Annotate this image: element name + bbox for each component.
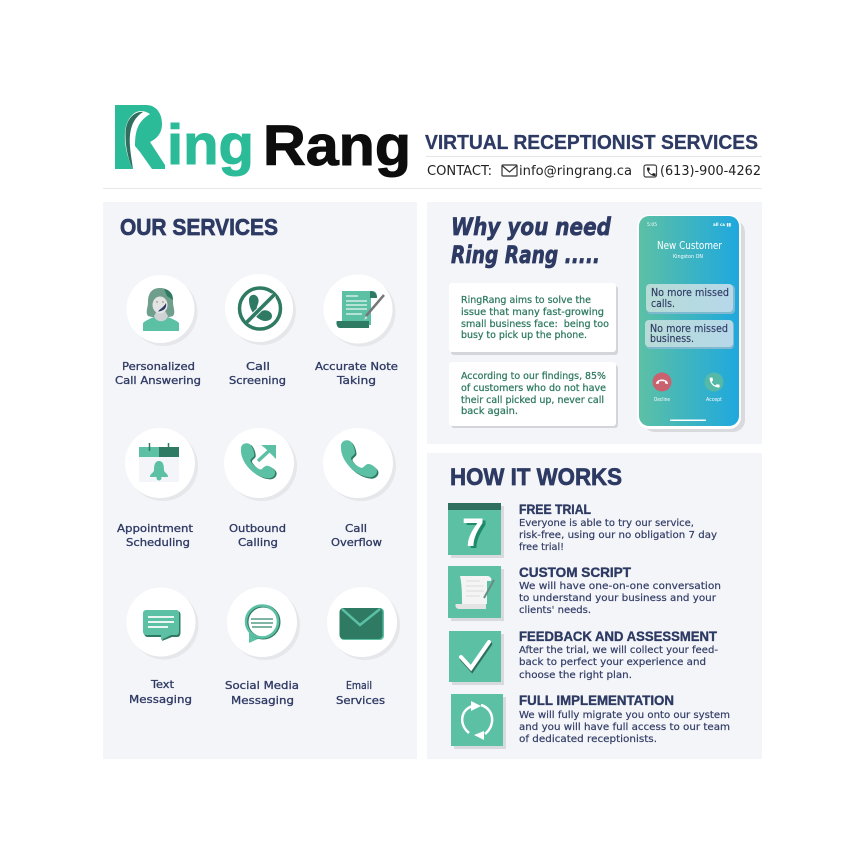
bubble: no more missed business: business. [650,333,694,345]
label [225,680,299,707]
service: outbound calling [224,428,297,549]
icon: script [448,566,504,621]
logo: RingRang [115,105,411,178]
label: Appointment [117,523,193,535]
phone mockup: 5:05 [647,222,657,228]
icon: refresh arrows [451,694,506,749]
title: virtual receptionist services: VIRTUAL RECEPTIONIST SERVICES [425,132,758,154]
label: Call [246,361,270,373]
contact row: (613)-900-4262 [660,164,761,179]
heading: why you need: Ring Rang ..... [451,241,600,269]
phone mockup: New Customer [657,240,723,252]
text: back to perfect your experience and [519,657,706,668]
label: Overflow [331,537,382,549]
card: findings: their call picked up, never call [461,395,604,406]
step: custom script [448,565,721,621]
card: aims: RingRang aims to solve the [461,295,591,306]
label: Accurate Note [315,361,398,373]
button: accept: Accept [706,397,722,403]
heading: our services: OUR SERVICES [120,214,278,240]
text: choose the right plan. [519,670,632,681]
bubble: no more missed calls: calls. [651,298,675,310]
text: FEEDBACK AND ASSESSMENT [519,629,718,644]
service: call screening [225,274,296,387]
card: findings: According to our findings, 85% [461,371,606,382]
text: Everyone is able to try our service, [519,518,694,529]
text: After the trial, we will collect your feed- [519,645,718,656]
panel: our services [103,202,417,759]
phone mockup: Kingston ON [673,254,703,260]
phone mockup [637,215,745,432]
text: CUSTOM SCRIPT [519,565,632,580]
text: and you will have full access to our team [519,722,730,733]
bubble: no more missed business: No more missed [650,323,728,335]
panel: why you need ring rang [427,202,762,444]
icon: envelope [502,165,517,176]
contact row: CONTACT: [427,164,492,179]
card: findings: back again. [461,406,518,417]
icon: check mark [449,631,504,685]
heading: why you need: Why you need [451,213,612,241]
text: to understand your business and your [519,593,717,604]
text [519,502,717,553]
logo: RingRang: ing [167,113,254,177]
label [129,679,192,706]
icon: calendar seven: 7 [465,513,487,557]
label: Messaging [129,694,192,706]
label: Text [150,679,174,691]
icon: calendar seven [448,503,504,558]
service: social media messaging [225,587,300,707]
label [229,361,286,387]
label [315,361,398,387]
label: Messaging [231,695,294,707]
label [331,523,382,549]
label [117,523,193,549]
text: We will fully migrate you onto our system [519,710,730,721]
text: FULL IMPLEMENTATION [519,693,674,708]
label: Services [336,695,385,707]
panel: how it works [427,453,762,759]
button: accept [704,372,724,403]
card: aims: issue that many fast-growing [461,307,604,318]
step: free trial [448,502,717,558]
text [519,565,721,616]
service: email services [327,587,400,707]
label: Call [345,523,367,535]
contact row: info@ringrang.ca [519,164,632,179]
text: FREE TRIAL [519,502,591,517]
card: findings: of customers who do not have [461,383,606,394]
label: Screening [229,375,286,387]
card: aims: small business face: being too [461,319,609,330]
text: We will have one-on-one conversation [519,581,721,592]
label: Social Media [225,680,299,692]
step: full implementation [451,693,730,749]
service: call overflow [323,428,396,549]
card: aims [449,283,618,355]
label [115,361,201,387]
step: feedback and assessment [449,629,718,685]
text [519,629,718,681]
service: appointment scheduling [117,428,198,549]
phone mockup: all ᴄᴀ ▮▮ [713,222,731,228]
service: accurate note taking [315,274,398,387]
bubble: no more missed business [645,320,734,349]
bubble: no more missed calls: No more missed [651,287,729,299]
logo: RingRang: Rang [263,114,411,178]
label: Taking [336,375,376,387]
text: clients' needs. [519,605,591,616]
label: Email [346,680,372,692]
label: Personalized [122,361,195,373]
service: text messaging [126,588,198,706]
heading: how it works: HOW IT WORKS [450,464,622,491]
text [519,693,730,745]
button: decline [652,372,672,403]
label: Scheduling [126,537,190,549]
label: Outbound [229,523,286,535]
label [336,680,385,707]
heading: why you need [451,213,612,269]
label: Call Answering [115,375,201,387]
card: findings [449,362,618,428]
text: free trial! [519,542,564,553]
label: Calling [238,537,278,549]
service: personalized call answering [115,275,201,387]
icon: phone [644,165,656,177]
label [229,523,286,549]
contact row [427,164,761,179]
bubble: no more missed calls [646,284,735,314]
card: aims: busy to pick up the phone. [461,330,587,341]
icon: calendar seven: 7 [462,511,484,555]
text: of dedicated receptionists. [519,734,657,745]
button: decline: Decline [654,397,670,403]
text: risk-free, using our no obligation 7 day [519,530,717,541]
